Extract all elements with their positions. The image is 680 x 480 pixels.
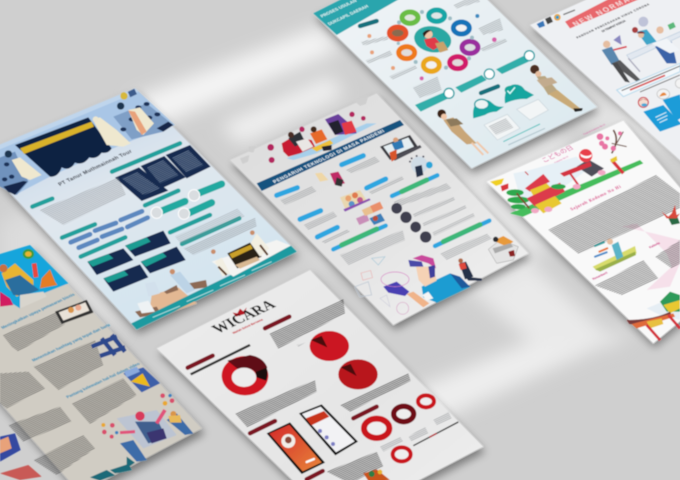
ring stat: dark	[394, 406, 414, 422]
logos	[120, 89, 137, 100]
logo: Wicara: WICARA	[209, 297, 279, 337]
long callout bars	[333, 175, 489, 249]
Japanese heading: こどもの日	[540, 144, 576, 164]
teal ribbon steps	[415, 51, 534, 112]
poster: New Normal workplace guide	[530, 0, 680, 205]
virus particles	[267, 112, 366, 163]
navy info cards top	[115, 145, 211, 201]
title pill	[565, 0, 647, 28]
heading: tip three: Pantang kelewatan hal-hal dalam video	[65, 361, 141, 399]
poster: Wicara red report	[157, 270, 485, 480]
round icons	[657, 79, 680, 99]
illustration: food	[363, 469, 390, 480]
pink haze	[622, 223, 680, 290]
plant decoration	[90, 457, 135, 480]
logo: Wicara: Wadah Solusi Bersama	[231, 318, 264, 335]
income comparison text	[413, 422, 458, 446]
connector dots	[397, 10, 474, 70]
teal section bars	[32, 143, 239, 257]
title banner	[313, 0, 403, 35]
teal bell badges	[473, 84, 534, 118]
icon: phone and video	[123, 367, 160, 392]
ring stat: lower	[393, 447, 411, 461]
illustration: video meeting group	[340, 190, 371, 212]
ring stat: large	[364, 419, 389, 438]
decorative corner icons	[240, 96, 368, 164]
icons: dark circle portraits	[391, 203, 431, 243]
title: PENGARUH TEKNOLOGI DI MASA PANDEMI	[272, 129, 387, 185]
heading: tip two: Menentukan hashtag yang tepat dan baru	[31, 322, 111, 362]
icon: samurai helmet	[662, 205, 680, 225]
info cards	[484, 99, 548, 145]
heading: tip one: Meningkatkan upaya pemasaran bisnis	[0, 292, 76, 330]
process rings	[389, 10, 478, 71]
label: Kabuto: Kabuto	[648, 241, 661, 249]
body paragraphs	[39, 178, 257, 255]
subtitle: Kodomo No Hi	[554, 156, 570, 164]
poster: Sejarah Kodomo No Hi	[487, 121, 680, 348]
illustration: temple gate	[627, 292, 680, 340]
card text top	[122, 150, 203, 195]
section pill	[360, 21, 377, 26]
illustration: virtual reality user	[383, 255, 470, 307]
donut chart	[222, 355, 268, 395]
lower paragraphs	[595, 240, 680, 295]
body text	[280, 157, 492, 265]
masked person icon	[638, 97, 648, 107]
header: mosque arches	[0, 88, 175, 195]
section pills	[188, 317, 377, 479]
poster: Proses Usulan Dukcapil Daerah	[313, 0, 599, 173]
blue list chips	[71, 211, 148, 248]
illustration: people on sofa	[282, 114, 377, 160]
icon: laptop with video call	[380, 135, 422, 162]
pagoda	[525, 172, 565, 213]
poster: Pengaruh Teknologi di Masa Pandemi	[230, 93, 530, 330]
body text blocks	[0, 309, 137, 475]
illustration: festival scene	[506, 130, 643, 217]
subtitle: PANDUAN PENCEGAHAN VIRUS CORONA	[575, 2, 651, 39]
illustration: woman with social media icons	[101, 393, 193, 462]
body text blocks	[235, 299, 452, 480]
center portrait circle	[412, 23, 453, 55]
illustration: portrait tiles	[356, 202, 385, 225]
body paragraph	[548, 175, 680, 254]
callout box	[617, 63, 680, 97]
title lines: DUKCAPIL DAERAH	[327, 4, 369, 26]
illustration: officer woman	[437, 109, 488, 155]
title banner	[257, 120, 404, 191]
illustration: standing man with phone	[458, 258, 482, 281]
title: PT Tanur Muthmainnah Tour	[57, 149, 135, 187]
corner mascot icon	[490, 178, 508, 191]
phone: red profile screen	[267, 422, 325, 474]
navy info cards lower	[87, 231, 186, 292]
blue section pills	[277, 156, 386, 237]
logos row	[537, 10, 575, 28]
illustration: bottom left pictures	[0, 433, 42, 480]
icon: hashtag	[92, 335, 125, 356]
section pill lower	[481, 86, 498, 93]
illustration: Kaaba	[15, 117, 112, 177]
illustration: two people	[315, 172, 345, 187]
box text	[655, 112, 668, 123]
pie chart top	[310, 331, 349, 361]
blue tips boxes	[643, 94, 680, 132]
illustration: desert pilgrims	[135, 269, 207, 320]
illustration: garden with person	[593, 239, 637, 272]
icon: laptop	[55, 300, 93, 324]
phone: white list screen	[299, 404, 358, 455]
poster: Proses Usulan right officer	[530, 65, 583, 112]
step labels	[361, 0, 507, 98]
ring stat: small	[418, 395, 434, 407]
bottom teal footer	[131, 246, 297, 329]
icon: online cluster	[409, 155, 433, 177]
poster: PT Tanur Muthmainnah Tour	[0, 88, 299, 334]
progress bars with badges	[151, 184, 222, 219]
small top caption: Festival Kodomo No Hi	[583, 123, 607, 136]
illustration: holographic shapes	[355, 257, 409, 314]
section title: Sejarah Kodomo No Hi	[570, 185, 623, 212]
illustration: desk worker	[488, 236, 518, 263]
pie chart bottom	[338, 359, 378, 389]
label: Rangkaian: Rasanbari!	[591, 271, 609, 281]
subtitle: DI TEMPAT KERJA	[601, 19, 628, 33]
poster: beige social media tips	[0, 245, 205, 480]
illustration: Kaaba with pilgrims	[211, 230, 291, 277]
illustration: office workers	[602, 17, 680, 83]
chart label: donut heading	[190, 344, 251, 375]
illustration: pilgrims	[5, 102, 154, 180]
header illustration	[0, 245, 68, 308]
footer contact text	[153, 262, 272, 317]
